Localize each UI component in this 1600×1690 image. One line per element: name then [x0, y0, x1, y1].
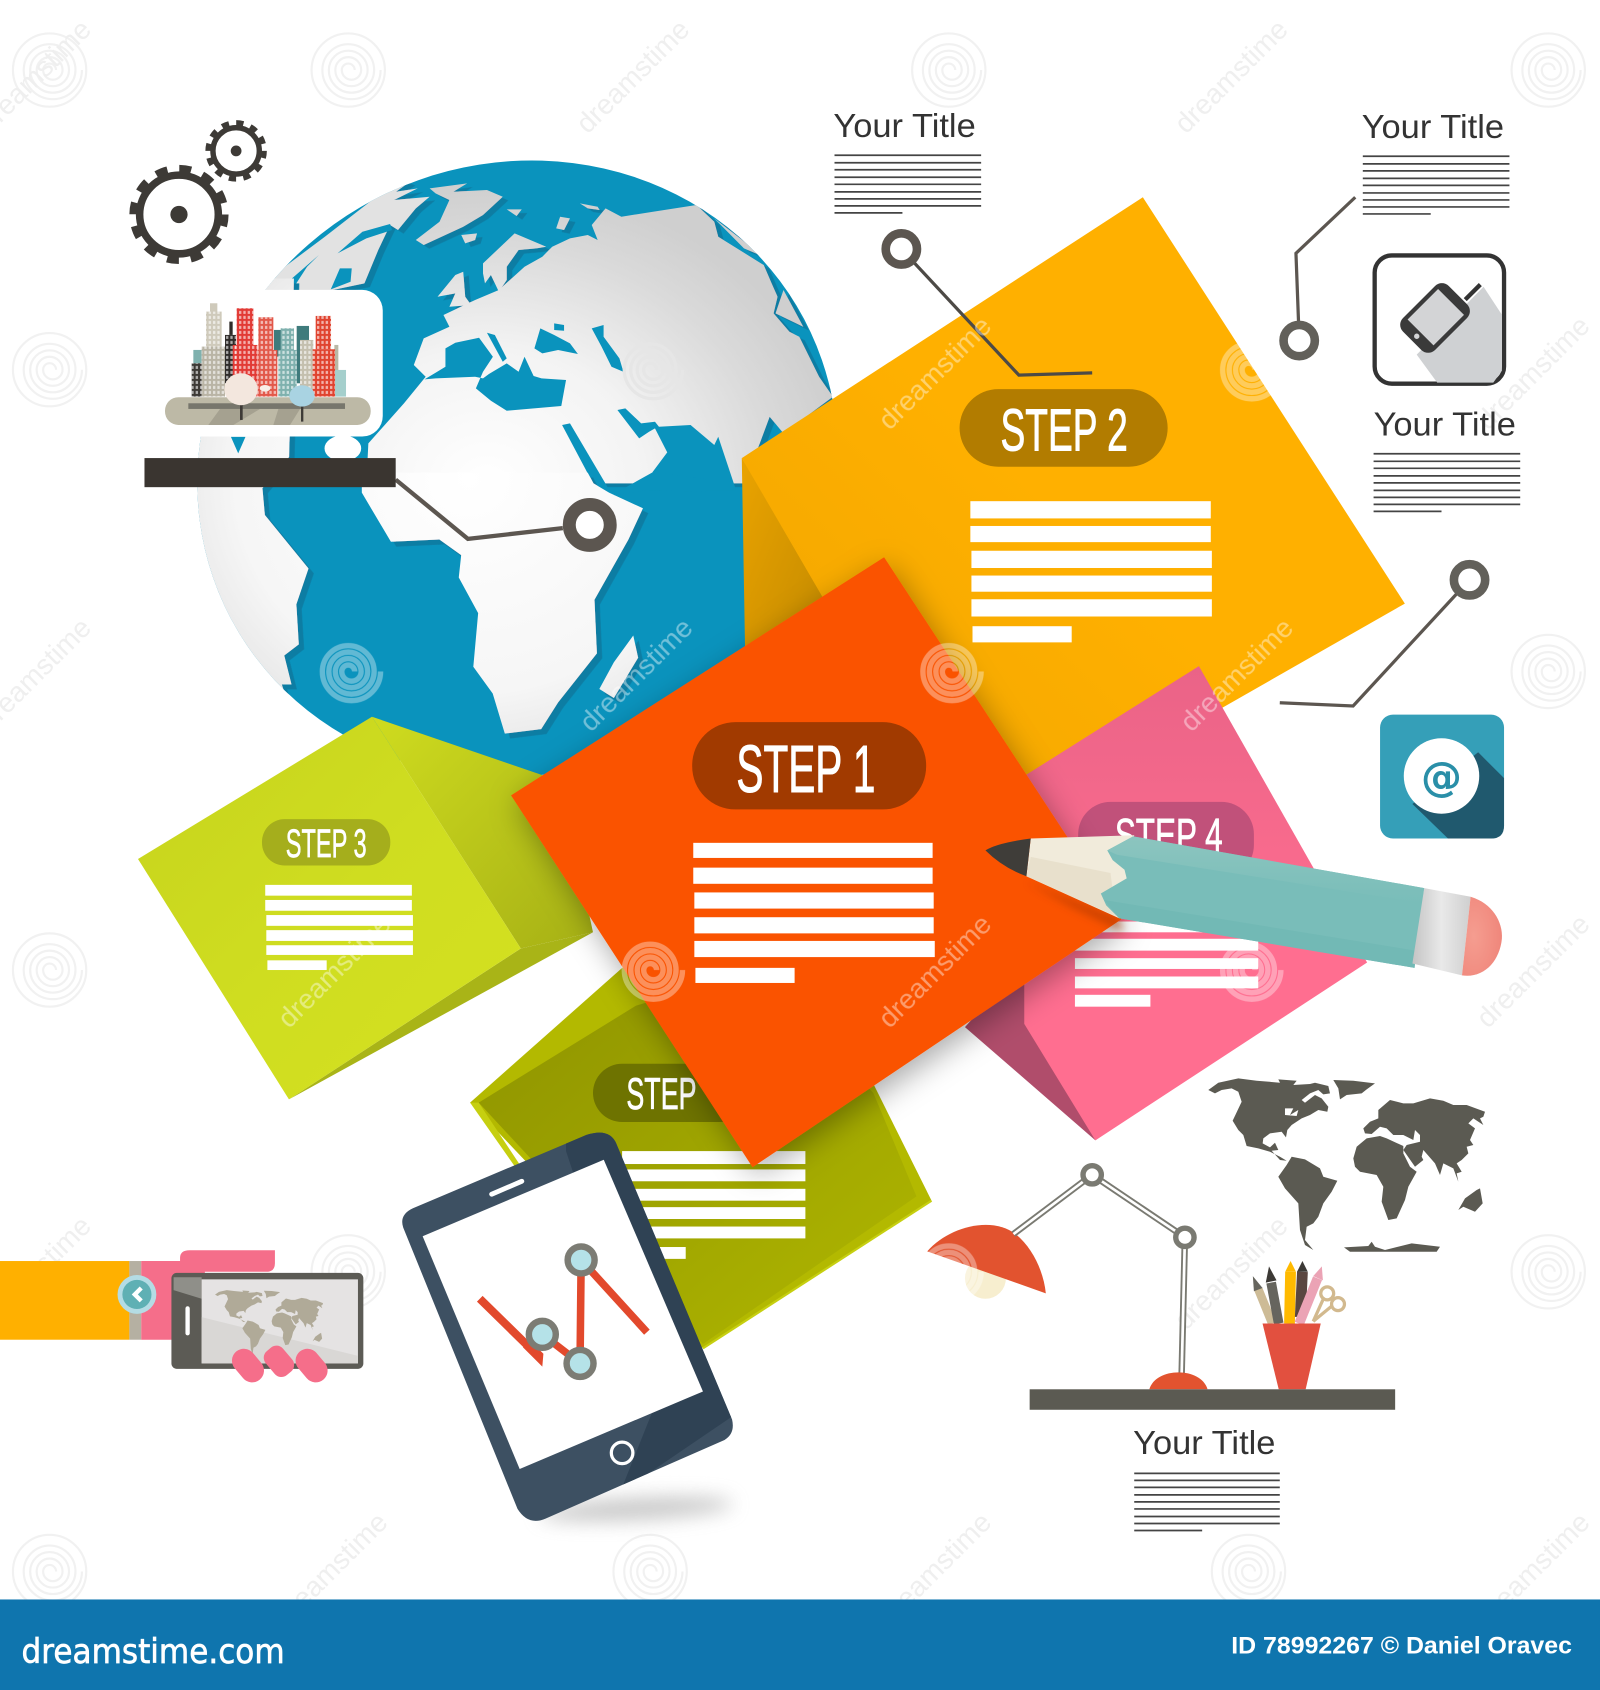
watermark spirals on colour — [322, 344, 1281, 1301]
watermark text on colour: dreamstime — [573, 612, 699, 737]
faint watermark text on white: dreamstime — [1470, 1506, 1596, 1632]
watermark text on colour: dreamstime — [1174, 612, 1299, 737]
icon: phone tile — [1375, 255, 1504, 384]
connector: title block 2 — [1284, 197, 1355, 356]
world map — [1208, 1078, 1485, 1252]
desk lamp — [927, 1166, 1208, 1389]
brand: dreamstime.com — [22, 1632, 285, 1671]
pencil — [985, 835, 1502, 976]
panel: step 5 — [470, 927, 932, 1348]
panel: step 4 — [965, 666, 1367, 1140]
step 3 badge: STEP 3 — [286, 822, 367, 866]
step 1 text lines — [693, 843, 935, 983]
faint watermark text on white: dreamstime — [1470, 908, 1596, 1034]
title block 4: Your Title — [1133, 1425, 1275, 1462]
line chart on tablet — [480, 1246, 647, 1377]
globe — [197, 160, 832, 775]
faint watermark text on white: dreamstime — [872, 1506, 997, 1632]
connector: email — [1280, 564, 1485, 706]
title block 3 — [1374, 406, 1520, 511]
connector: globe to shelf — [396, 480, 610, 545]
northern land — [266, 183, 832, 487]
step 5 badge: STEP — [626, 1070, 696, 1119]
panel: step 3 — [138, 717, 593, 1099]
title block 1: Your Title — [833, 108, 976, 145]
sea overlays — [289, 224, 736, 490]
step 4 badge — [1078, 802, 1254, 877]
shelf bar — [144, 458, 396, 487]
step 3 text lines — [265, 885, 413, 970]
faint watermark text on white: dreamstime — [1168, 1210, 1294, 1335]
connector: step 2 title — [886, 233, 1092, 375]
faint watermark text on white: dreamstime — [570, 14, 695, 139]
title block 2 — [1362, 109, 1509, 214]
city card — [162, 290, 383, 437]
panel: step 1 — [511, 557, 1121, 1167]
step 1 badge — [692, 722, 926, 809]
title block 4 — [1133, 1425, 1280, 1530]
watermark text on colour: dreamstime — [872, 908, 997, 1034]
icon: email tile — [1380, 715, 1504, 839]
pencil cup — [1253, 1261, 1344, 1389]
faint watermark text on white: dreamstime — [268, 1506, 393, 1632]
icon: email tile: @ — [1421, 753, 1462, 801]
faint spiral on land — [624, 344, 682, 399]
title block 2: Your Title — [1362, 109, 1504, 146]
watermark text on colour: dreamstime — [872, 310, 997, 435]
step 4 badge: STEP 4 — [1115, 809, 1223, 862]
tablet shadow — [539, 1493, 734, 1525]
step 3 badge — [262, 819, 390, 866]
faint watermark text on white: dreamstime — [1168, 14, 1294, 139]
step 5 badge — [593, 1064, 750, 1122]
step 5 text lines — [622, 1151, 805, 1259]
step 2 badge: STEP 2 — [1001, 397, 1128, 464]
desk shelf — [1030, 1389, 1395, 1410]
footer banner — [0, 1599, 1600, 1690]
panel: step 2 — [742, 197, 1405, 851]
icon: hand holding phone — [0, 1250, 363, 1387]
title block 3: Your Title — [1374, 406, 1516, 443]
watermark text on colour — [271, 310, 1299, 1034]
step 1 badge: STEP 1 — [736, 733, 875, 807]
step 4 text lines — [1075, 922, 1258, 1007]
tablet — [402, 1132, 733, 1521]
watermark text on colour: dreamstime — [271, 908, 397, 1034]
step 2 text lines — [970, 501, 1212, 642]
image id: ID 78992267 © Daniel Oravec — [1231, 1633, 1572, 1659]
faint watermark text on white: dreamstime — [1470, 310, 1596, 435]
icon: gears — [133, 123, 264, 260]
title block 1 — [833, 108, 981, 213]
southern land — [197, 278, 653, 738]
step 2 badge — [960, 389, 1168, 467]
